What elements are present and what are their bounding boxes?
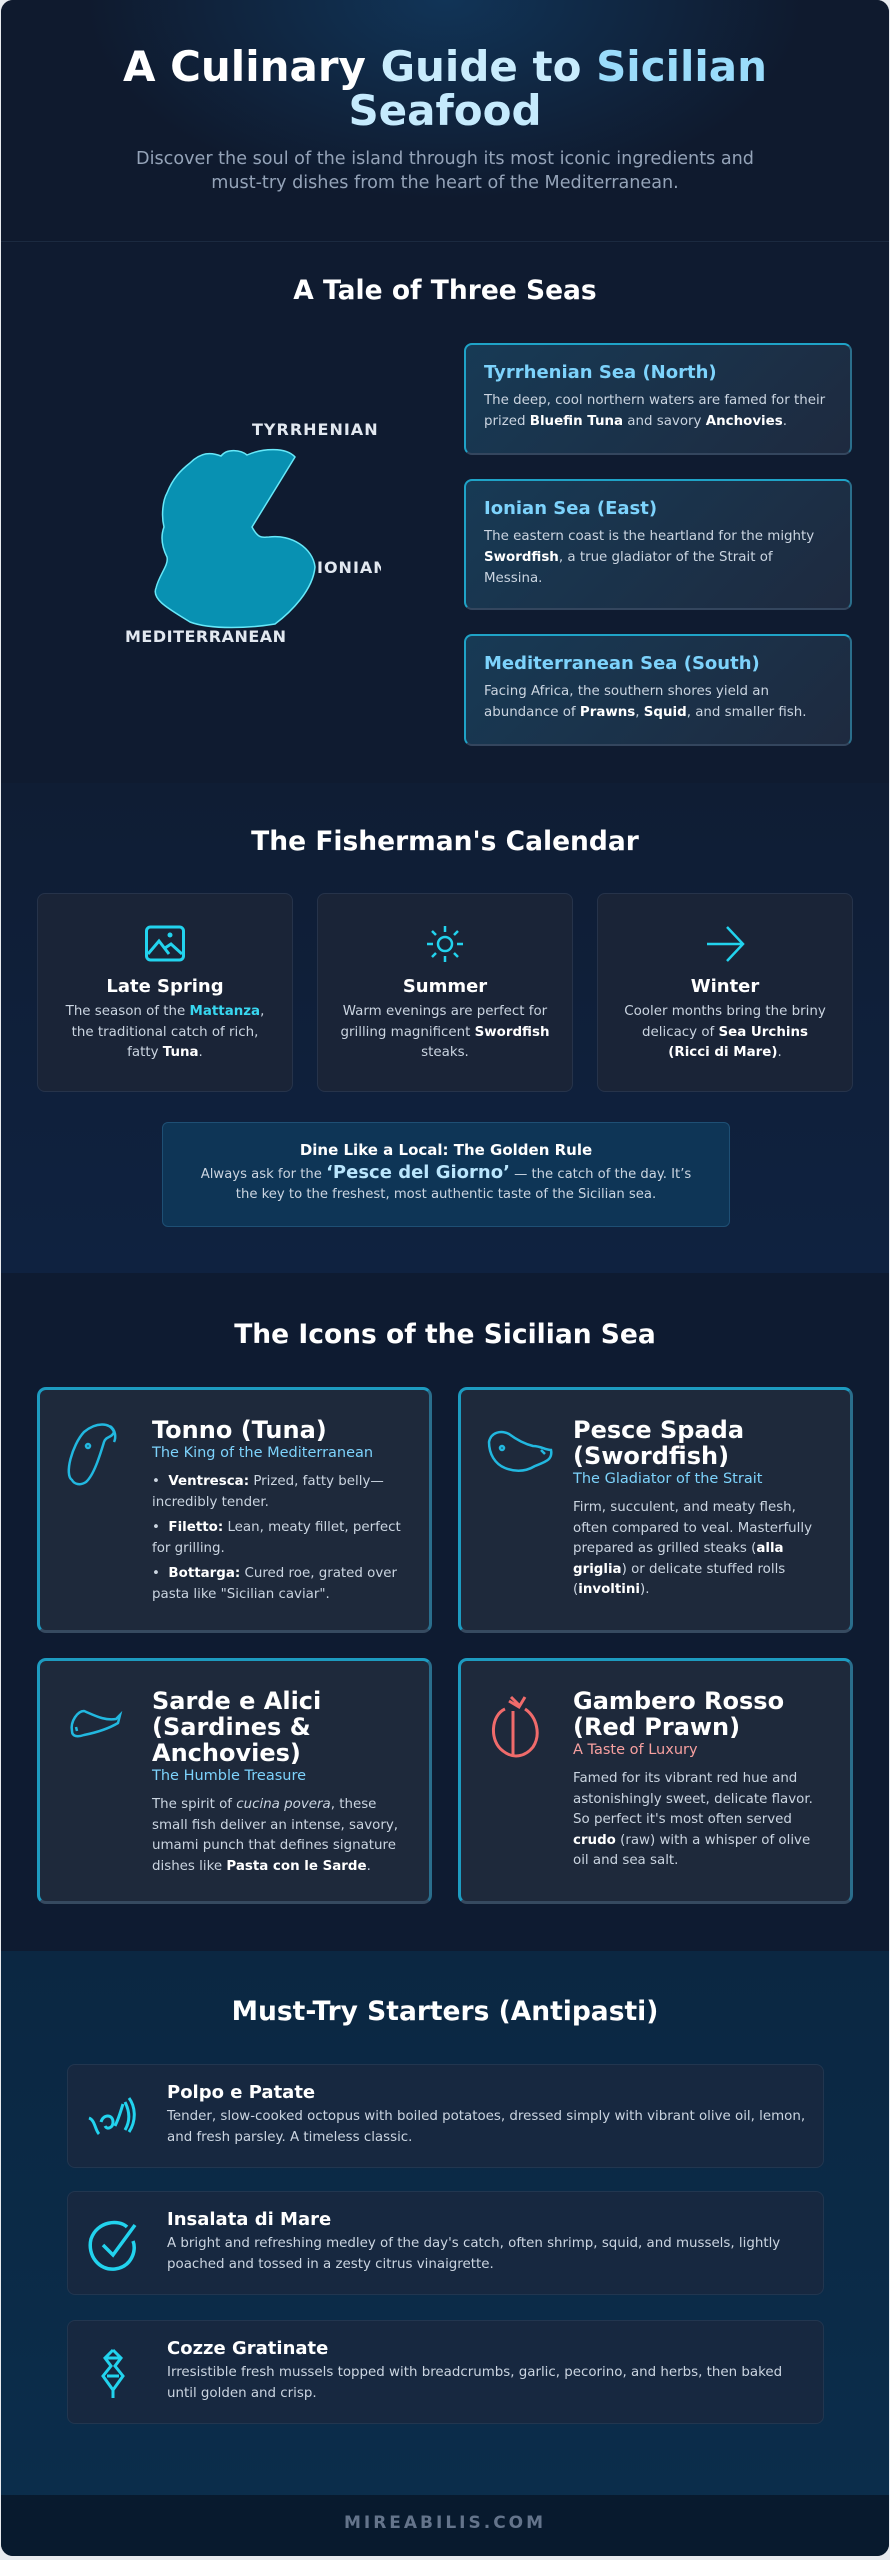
footer: MIREABILIS.COM bbox=[344, 2513, 546, 2533]
card: Gambero Rosso: Famed for its vibrant red hue and astonishingly sweet, delicate flavor. So perfect it's most often served crudo (raw) with a whisper of olive oil and sea salt. bbox=[573, 1771, 813, 1868]
card: Tyrrhenian: Tyrrhenian Sea (North) bbox=[484, 362, 717, 383]
card: Pesce Spada: Firm, succulent, and meaty flesh, often compared to veal. Masterfully prepared as grilled steaks (alla griglia) or delicate stuffed rolls (involtini). bbox=[573, 1500, 812, 1597]
card: Late Spring bbox=[37, 893, 293, 1092]
icon: sardine bbox=[70, 1710, 122, 1738]
card: Mediterranean bbox=[464, 634, 852, 746]
section: icons bbox=[1, 1273, 889, 1951]
map of Sicily bbox=[125, 420, 381, 646]
card: Insalata di Mare bbox=[67, 2191, 824, 2295]
card: Sarde e Alici bbox=[37, 1658, 432, 1904]
card: Cozze Gratinate: Cozze Gratinate bbox=[167, 2338, 328, 2359]
card: Pesce Spada: Pesce Spada (Swordfish) bbox=[573, 1416, 744, 1470]
card: Ionian: The eastern coast is the heartland for the mighty Swordfish, a true gladiator of the Strait of Messina. bbox=[484, 529, 814, 586]
card: Cozze Gratinate: Irresistible fresh mussels topped with breadcrumbs, garlic, pecorino, and herbs, then baked until golden and crisp. bbox=[167, 2365, 782, 2400]
card: Polpo e Patate: Tender, slow-cooked octopus with boiled potatoes, dressed simply with vibrant olive oil, lemon, and fresh parsley. A timeless classic. bbox=[167, 2109, 805, 2144]
card: Insalata di Mare: A bright and refreshing medley of the day's catch, often shrimp, squid, and mussels, lightly poached and tossed in a zesty citrus vinaigrette. bbox=[167, 2236, 780, 2272]
icon: arrow bbox=[707, 926, 745, 962]
icon: swordfish bbox=[488, 1430, 553, 1472]
card: Summer bbox=[317, 893, 573, 1092]
map of Sicily: MEDITERRANEAN bbox=[125, 627, 287, 646]
card: Winter: Cooler months bring the briny delicacy of Sea Urchins (Ricci di Mare). bbox=[624, 1004, 826, 1060]
section: three seas bbox=[1, 243, 889, 783]
card: Sarde e Alici: The Humble Treasure bbox=[152, 1768, 306, 1784]
icon: sun bbox=[427, 926, 463, 962]
card: Summer: Summer bbox=[403, 976, 487, 997]
card: Winter: Winter bbox=[691, 976, 759, 997]
title bbox=[123, 42, 767, 135]
callout: golden rule bbox=[162, 1122, 730, 1227]
footer bbox=[1, 2495, 889, 2556]
icon: red prawn bbox=[492, 1696, 539, 1758]
card: Tonno: • Bottarga: Cured roe, grated over pasta like "Sicilian caviar". bbox=[152, 1566, 397, 1602]
card: Winter bbox=[597, 893, 853, 1092]
section: starters bbox=[1, 1951, 889, 2495]
subtitle: must-try dishes from the heart of the Mediterranean. bbox=[211, 173, 679, 193]
card: Gambero Rosso: A Taste of Luxury bbox=[573, 1742, 698, 1758]
title: Seafood bbox=[348, 86, 542, 135]
card: Gambero Rosso bbox=[458, 1658, 853, 1904]
icon: octopus bbox=[88, 2097, 136, 2135]
subtitle: Discover the soul of the island through its most iconic ingredients and bbox=[136, 149, 754, 169]
card: Ionian bbox=[464, 479, 852, 610]
card: Tonno: • Ventresca: Prized, fatty belly—incredibly tender. bbox=[152, 1474, 384, 1510]
header bbox=[1, 0, 889, 242]
card: Tonno bbox=[37, 1387, 432, 1633]
card: Sarde e Alici: The spirit of cucina povera, these small fish deliver an intense, savory, umami punch that defines signature dishes like Pasta con le Sarde. bbox=[152, 1797, 398, 1874]
card: Late Spring: Late Spring bbox=[106, 976, 224, 997]
card: Pesce Spada: The Gladiator of the Strait bbox=[573, 1471, 762, 1487]
card: Tyrrhenian: The deep, cool northern waters are famed for their prized Bluefin Tuna and savory Anchovies. bbox=[484, 393, 825, 429]
icon: mussel bbox=[101, 2349, 125, 2398]
card: Ionian: Ionian Sea (East) bbox=[484, 498, 657, 519]
card: Tonno: The King of the Mediterranean bbox=[152, 1445, 373, 1461]
card: Polpo e Patate bbox=[67, 2064, 824, 2168]
title: A Culinary Guide to Sicilian bbox=[123, 42, 767, 91]
card: Tonno: • Filetto: Lean, meaty fillet, perfect for grilling. bbox=[152, 1520, 401, 1556]
card: Summer: Warm evenings are perfect for grilling magnificent Swordfish steaks. bbox=[341, 1004, 549, 1060]
heading: icons: The Icons of the Sicilian Sea bbox=[234, 1319, 656, 1350]
subtitle bbox=[136, 149, 754, 193]
icon: image bbox=[145, 926, 185, 962]
card: Mediterranean: Facing Africa, the southern shores yield an abundance of Prawns, Squid, and smaller fish. bbox=[484, 684, 806, 720]
heading: calendar: The Fisherman's Calendar bbox=[251, 826, 639, 857]
callout: golden rule: the key to the freshest, most authentic taste of the Sicilian sea. bbox=[236, 1187, 656, 1202]
section: calendar bbox=[1, 783, 889, 1273]
card: Gambero Rosso: Gambero Rosso (Red Prawn) bbox=[573, 1687, 784, 1741]
icon: check bbox=[88, 2220, 136, 2271]
card: Cozze Gratinate bbox=[67, 2320, 824, 2424]
card: Sarde e Alici: Sarde e Alici (Sardines & Anchovies) bbox=[152, 1687, 321, 1767]
card: Tonno: Tonno (Tuna) bbox=[152, 1416, 327, 1444]
card: Mediterranean: Mediterranean Sea (South) bbox=[484, 653, 760, 674]
callout: golden rule: Dine Like a Local: The Golden Rule bbox=[300, 1141, 592, 1159]
card: Tyrrhenian bbox=[464, 343, 852, 455]
callout: golden rule: Always ask for the ‘Pesce del Giorno’ — the catch of the day. It’s bbox=[201, 1162, 691, 1183]
card: Pesce Spada bbox=[458, 1387, 853, 1633]
map of Sicily: TYRRHENIAN bbox=[252, 420, 379, 439]
heading: A Tale of Three Seas: A Tale of Three Seas bbox=[293, 275, 597, 306]
card: Polpo e Patate: Polpo e Patate bbox=[167, 2082, 315, 2103]
heading: starters: Must-Try Starters (Antipasti) bbox=[232, 1996, 658, 2027]
card: Late Spring: The season of the Mattanza, the traditional catch of rich, fatty Tuna. bbox=[66, 1004, 264, 1060]
icon: tuna bbox=[68, 1423, 116, 1486]
card: Insalata di Mare: Insalata di Mare bbox=[167, 2209, 331, 2230]
